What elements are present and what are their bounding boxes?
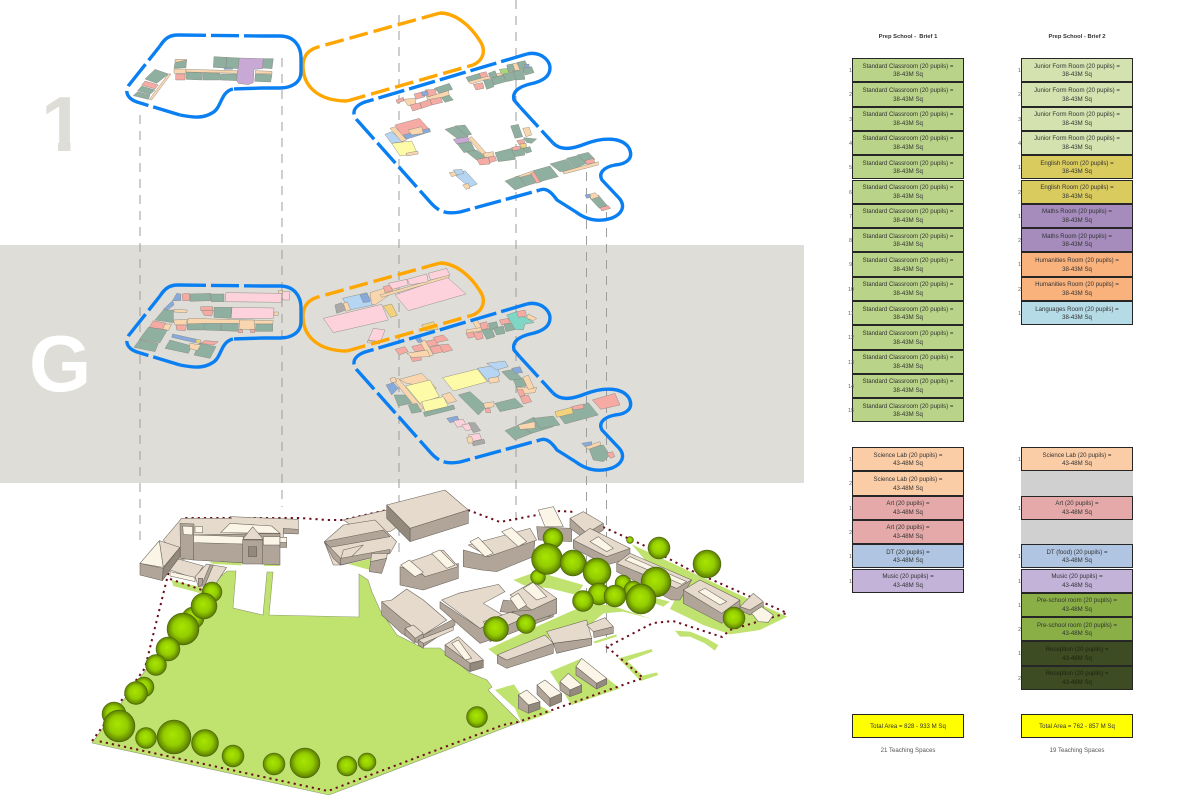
table: brief 2 form and subject rooms: Maths Room (20 pupils) =: [1042, 233, 1112, 240]
band: ground floor background: [0, 245, 804, 483]
heading: brief 1: Prep School - Brief 1: [879, 34, 937, 40]
note: brief 2 teaching spaces: 19 Teaching Spaces: [1050, 747, 1104, 754]
table: brief 1 classrooms: Standard Classroom (20 pupils) =: [863, 354, 953, 361]
table: brief 1 specialist rooms: [849, 447, 964, 593]
table: brief 2 form and subject rooms: Junior Form Room (20 pupils) =: [1034, 63, 1120, 70]
table: brief 1 specialist rooms: Art (20 pupils) =: [886, 524, 930, 531]
text: 14: [848, 384, 854, 390]
text: 8: [849, 238, 852, 244]
site: lawns: [92, 544, 787, 795]
text: 2: [849, 530, 852, 536]
table: brief 1 classrooms: 38-43M Sq: [893, 266, 923, 273]
table: brief 1 specialist rooms: 43-48M Sq: [893, 509, 923, 516]
heading: floor level 1: 1: [41, 80, 84, 168]
table: brief 1 classrooms: 38-43M Sq: [893, 193, 923, 200]
text: 1: [1018, 603, 1021, 609]
table: brief 2 specialist rooms: Science Lab (20 pupils) =: [1043, 452, 1111, 459]
table: brief 2 specialist rooms: 43-48M Sq: [1062, 630, 1092, 637]
text: 1: [849, 554, 852, 560]
table: brief 2 form and subject rooms: 38-43M Sq: [1062, 168, 1092, 175]
forecourt lawn strips: [172, 558, 372, 594]
table: brief 2 form and subject rooms: Junior Form Room (20 pupils) =: [1034, 135, 1120, 142]
text: 1: [849, 457, 852, 463]
table: brief 1 specialist rooms: Music (20 pupils) =: [882, 573, 934, 580]
table: brief 2 specialist rooms: 43-48M Sq: [1062, 509, 1092, 516]
table: brief 1 classrooms: Standard Classroom (20 pupils) =: [863, 306, 953, 313]
table: brief 2 form and subject rooms: 38-43M Sq: [1062, 217, 1092, 224]
table: brief 2 form and subject rooms: Humanities Room (20 pupils) =: [1035, 257, 1119, 264]
table: brief 2 specialist rooms: DT (food) (20 pupils) =: [1046, 549, 1108, 556]
table: brief 1 classrooms: 38-43M Sq: [893, 168, 923, 175]
table: brief 2 form and subject rooms: Junior Form Room (20 pupils) =: [1034, 111, 1120, 118]
text: 12: [848, 335, 854, 341]
blue zone outline, level 1 main: [354, 53, 631, 220]
L-shaped central block: [440, 602, 505, 643]
south hall group: [343, 510, 400, 533]
site: trees: [102, 528, 745, 778]
table: brief 1 specialist rooms: Art (20 pupils) =: [886, 500, 930, 507]
table: brief 1 classrooms: Standard Classroom (20 pupils) =: [863, 281, 953, 288]
table: brief 1 classrooms: 38-43M Sq: [893, 387, 923, 394]
text: 3: [1018, 117, 1021, 123]
text: 5: [849, 165, 852, 171]
floor plan G: north-west buildings: [134, 268, 466, 358]
table: brief 2 form and subject rooms: [1018, 58, 1133, 325]
text: 2: [1018, 190, 1021, 196]
table: brief 1 classrooms: 38-43M Sq: [893, 96, 923, 103]
orange zone buildings: [323, 304, 388, 333]
large hall: [387, 490, 468, 528]
small south houses: [518, 690, 540, 705]
table: brief 1 classrooms: 38-43M Sq: [893, 71, 923, 78]
table: brief 2 form and subject rooms: 38-43M Sq: [1062, 144, 1092, 151]
table: brief 1 classrooms: Standard Classroom (20 pupils) =: [863, 330, 953, 337]
text: 2: [1018, 287, 1021, 293]
table: brief 2 specialist rooms: [1018, 447, 1133, 690]
text: 1: [1018, 651, 1021, 657]
text: 3: [849, 117, 852, 123]
table: brief 2 specialist rooms: Art (20 pupils) =: [1055, 500, 1099, 507]
table: brief 1 specialist rooms: Science Lab (20 pupils) =: [874, 452, 942, 459]
table: brief 1 specialist rooms: DT (20 pupils) =: [886, 549, 930, 556]
table: brief 1 classrooms: Standard Classroom (20 pupils) =: [863, 257, 953, 264]
table: brief 1 classrooms: Standard Classroom (20 pupils) =: [863, 378, 953, 385]
text: 1: [849, 506, 852, 512]
table: brief 2 specialist rooms: 43-48M Sq: [1062, 679, 1092, 686]
text: 2: [849, 481, 852, 487]
table: brief 1 classrooms: Standard Classroom (20 pupils) =: [863, 111, 953, 118]
table: brief 2 specialist rooms: 43-48M Sq: [1062, 606, 1092, 613]
text: 1: [1018, 214, 1021, 220]
note: brief 1 teaching spaces: 21 Teaching Spaces: [881, 747, 935, 754]
total: brief 2: Total Area = 762 - 857 M Sq: [1039, 723, 1115, 730]
floor plan 1: north-west buildings: [133, 57, 273, 100]
text: 11: [848, 311, 854, 317]
total: brief 1: [852, 714, 964, 738]
blue zone outline, level G west: [127, 285, 301, 367]
text: 7: [849, 214, 852, 220]
text: 2: [1018, 92, 1021, 98]
heading: floor level G: G: [29, 319, 91, 408]
site: dotted boundary line: [92, 510, 787, 791]
floor plan 1: main campus buildings: [385, 61, 611, 211]
text: 1: [1018, 554, 1021, 560]
table: brief 1 classrooms: Standard Classroom (20 pupils) =: [863, 233, 953, 240]
table: brief 2 form and subject rooms: Maths Room (20 pupils) =: [1042, 208, 1112, 215]
table: brief 2 form and subject rooms: Junior Form Room (20 pupils) =: [1034, 87, 1120, 94]
table: brief 1 specialist rooms: 43-48M Sq: [893, 485, 923, 492]
table: brief 2 specialist rooms: Pre-school room (20 pupils) =: [1037, 622, 1117, 629]
text: 4: [1018, 141, 1021, 147]
west block: [382, 602, 423, 647]
text: 4: [849, 141, 852, 147]
table: brief 2 form and subject rooms: 38-43M Sq: [1062, 193, 1092, 200]
boundary outlines: level 1: [127, 13, 631, 220]
text: 2: [1018, 627, 1021, 633]
blue zone outline, level G main: [354, 303, 631, 470]
table: brief 2 form and subject rooms: 38-43M Sq: [1062, 290, 1092, 297]
table: brief 1 classrooms: Standard Classroom (20 pupils) =: [863, 135, 953, 142]
site: central buildings: [382, 490, 773, 713]
table: brief 1 specialist rooms: 43-48M Sq: [893, 533, 923, 540]
table: brief 2 form and subject rooms: English Room (20 pupils) =: [1040, 160, 1114, 167]
table: brief 1 classrooms: 38-43M Sq: [893, 144, 923, 151]
text: 1: [1018, 165, 1021, 171]
text: 15: [848, 408, 854, 414]
table: brief 1 classrooms: 38-43M Sq: [893, 339, 923, 346]
floor plan G: main campus buildings: [386, 310, 620, 462]
terrace houses: [400, 563, 458, 590]
text: 2: [849, 92, 852, 98]
text: 2: [1018, 238, 1021, 244]
orange zone outline, level 1: [303, 13, 483, 101]
table: brief 2 form and subject rooms: 38-43M Sq: [1062, 71, 1092, 78]
table: brief 2 form and subject rooms: 38-43M Sq: [1062, 241, 1092, 248]
text: 1: [1018, 578, 1021, 584]
table: brief 2 form and subject rooms: 38-43M Sq: [1062, 266, 1092, 273]
table: brief 1 classrooms: Standard Classroom (20 pupils) =: [863, 403, 953, 410]
text: 1: [1018, 506, 1021, 512]
table: brief 2 specialist rooms: 43-48M Sq: [1062, 557, 1092, 564]
text: 1: [1018, 68, 1021, 74]
blue zone outline, level 1 west: [127, 35, 301, 117]
table: brief 1 classrooms: 38-43M Sq: [893, 217, 923, 224]
table: brief 2 form and subject rooms: 38-43M Sq: [1062, 314, 1092, 321]
table: brief 2 form and subject rooms: Humanities Room (20 pupils) =: [1035, 281, 1119, 288]
table: brief 1 classrooms: Standard Classroom (20 pupils) =: [863, 208, 953, 215]
table: brief 1 classrooms: 38-43M Sq: [893, 290, 923, 297]
table: brief 1 classrooms: 38-43M Sq: [893, 241, 923, 248]
table: brief 2 form and subject rooms: 38-43M Sq: [1062, 120, 1092, 127]
table: brief 1 classrooms: 38-43M Sq: [893, 411, 923, 418]
total: brief 1: Total Area = 828 - 933 M Sq: [870, 723, 946, 730]
table: brief 2 specialist rooms: Music (20 pupils) =: [1051, 573, 1103, 580]
table: brief 2 form and subject rooms: Languages Room (20 pupils) =: [1035, 306, 1119, 313]
table: brief 2 form and subject rooms: English Room (20 pupils) =: [1040, 184, 1114, 191]
south-west house: [445, 637, 483, 663]
boundary outlines: level G: [127, 263, 631, 470]
text: 1: [849, 68, 852, 74]
table: brief 1 classrooms: 38-43M Sq: [893, 314, 923, 321]
text: 10: [848, 287, 854, 293]
table: brief 2 specialist rooms: 43-48M Sq: [1062, 582, 1092, 589]
table: brief 1 classrooms: [848, 58, 964, 422]
text: 1: [1018, 311, 1021, 317]
illustration: exploded campus plans: [0, 0, 804, 796]
total: brief 2: [1021, 714, 1133, 738]
table: brief 1 classrooms: 38-43M Sq: [893, 363, 923, 370]
text: 13: [848, 360, 854, 366]
table: brief 1 specialist rooms: Science Lab (20 pupils) =: [874, 476, 942, 483]
table: brief 1 specialist rooms: 43-48M Sq: [893, 582, 923, 589]
main lawn: [92, 571, 520, 795]
table: brief 1 classrooms: Standard Classroom (20 pupils) =: [863, 63, 953, 70]
table: brief 2 specialist rooms: Reception (20 pupils) =: [1046, 646, 1108, 653]
table: brief 2 specialist rooms: 43-48M Sq: [1062, 460, 1092, 467]
heading: brief 2: Prep School - Brief 2: [1048, 34, 1106, 40]
text: 1: [1018, 457, 1021, 463]
table: brief 1 classrooms: Standard Classroom (20 pupils) =: [863, 87, 953, 94]
table: brief 2 specialist rooms: Pre-school room (20 pupils) =: [1037, 597, 1117, 604]
text: 6: [849, 190, 852, 196]
table: brief 2 form and subject rooms: 38-43M Sq: [1062, 96, 1092, 103]
courtyard lawns: [488, 544, 787, 723]
table: brief 1 classrooms: Standard Classroom (20 pupils) =: [863, 160, 953, 167]
text: 9: [849, 262, 852, 268]
table: brief 2 specialist rooms: 43-48M Sq: [1062, 655, 1092, 662]
table: brief 1 classrooms: 38-43M Sq: [893, 120, 923, 127]
text: 1: [849, 578, 852, 584]
table: brief 1 specialist rooms: 43-48M Sq: [893, 557, 923, 564]
table: brief 1 specialist rooms: 43-48M Sq: [893, 460, 923, 467]
lower range: [497, 643, 553, 668]
text: 2: [1018, 676, 1021, 682]
orange zone outline, level G: [303, 263, 483, 351]
projection guide lines: [140, 0, 606, 658]
text: 1: [1018, 262, 1021, 268]
site: church and west buildings: [140, 510, 400, 587]
table: brief 2 specialist rooms: Reception (20 pupils) =: [1046, 670, 1108, 677]
table: brief 1 classrooms: Standard Classroom (20 pupils) =: [863, 184, 953, 191]
